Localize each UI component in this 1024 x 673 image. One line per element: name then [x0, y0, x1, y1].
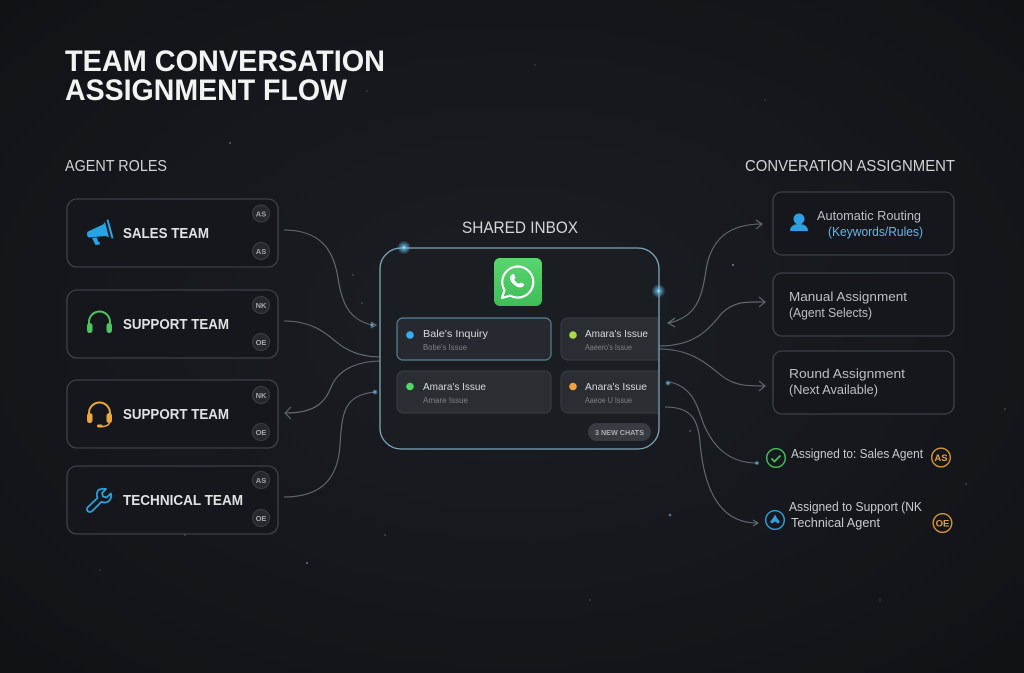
icon: orange headset [87, 403, 112, 428]
icon: wrench [87, 489, 111, 512]
routing text: Automatic Routing [817, 208, 921, 223]
avatar badges [252, 296, 270, 350]
panel: round assignment [773, 351, 954, 414]
new chats badge [588, 423, 651, 441]
team label: sales: SALES TEAM [123, 226, 209, 242]
badge: OE: OE [936, 518, 949, 530]
avatar badges [252, 205, 270, 260]
heading: conversation assignment: CONVERATION ASSIGNMENT [745, 158, 955, 175]
chat card: amara's issue green [397, 371, 551, 413]
chat card: amara's issue green: Amara's Issue [423, 381, 486, 393]
routing text [817, 208, 923, 239]
team label: support: SUPPORT TEAM [123, 317, 229, 333]
chat card: amara's issue lime: Amara's Issue [585, 328, 648, 340]
heading: agent roles: AGENT ROLES [65, 158, 167, 175]
chat card: bale's inquiry [397, 318, 551, 360]
heading: shared inbox: SHARED INBOX [462, 218, 578, 237]
chat card: amara's issue orange: Anara's Issue [585, 381, 647, 393]
panel: manual assignment: Manual Assignment [789, 289, 907, 304]
title [65, 45, 385, 107]
chat card: amara's issue orange [561, 371, 658, 413]
badge: AS: AS [934, 453, 948, 464]
avatar badges: NK [256, 301, 267, 310]
avatar badges: AS [256, 210, 266, 218]
connector arrows: teams to inbox [284, 230, 381, 497]
team label: technical: TECHNICAL TEAM [123, 493, 243, 509]
chat card: amara's issue lime [561, 318, 658, 360]
panel: technical team [67, 466, 278, 534]
badge: AS [932, 448, 950, 467]
panel: round assignment: (Next Available) [789, 382, 878, 397]
avatar badges: OE [256, 514, 266, 523]
avatar badges: OE [256, 338, 266, 347]
icon: green check [767, 449, 785, 467]
status: assigned to support: Assigned to Support (NK [789, 500, 923, 514]
panel: round assignment: Round Assignment [789, 366, 905, 381]
panel: support team two [67, 380, 278, 448]
title: TEAM CONVERSATION [65, 45, 385, 78]
team label: support: SUPPORT TEAM [123, 407, 229, 423]
icon: blue agent [766, 511, 784, 529]
chat card: amara's issue orange: Aaeoe U Issue [585, 396, 632, 405]
icon: megaphone [87, 220, 114, 245]
chat card: bale's inquiry: Bale's Inquiry [423, 328, 489, 340]
chat card: amara's issue lime: Aaeero's Issue [585, 343, 632, 352]
icon: green headphones [87, 312, 112, 333]
routing text: (Keywords/Rules) [828, 224, 923, 239]
panel: sales team [67, 199, 278, 267]
avatar badges: AS [256, 247, 266, 256]
new chats badge: 3 NEW CHATS [595, 428, 644, 437]
avatar badges [252, 472, 270, 526]
status: assigned to sales agent [767, 447, 950, 467]
status: assigned to sales agent: Assigned to: Sales Agent [791, 447, 923, 461]
panel: shared inbox [380, 240, 666, 449]
avatar badges: AS [256, 476, 266, 485]
panel: manual assignment: (Agent Selects) [789, 305, 872, 320]
chat card: amara's issue green: Amare Issue [423, 396, 469, 405]
chat card: bale's inquiry: Bobe's Issue [423, 343, 468, 352]
icon: person [790, 214, 808, 231]
avatar badges: NK [256, 391, 267, 400]
panel: manual assignment [773, 273, 954, 336]
status: assigned to support [766, 500, 952, 532]
avatar badges: OE [256, 428, 266, 437]
badge: OE [933, 514, 952, 532]
panel: support team [67, 290, 278, 358]
icon: whatsapp [494, 258, 542, 306]
glow node: top [397, 240, 411, 254]
glow node: right [652, 284, 666, 298]
connector arrows: inbox to assignment [659, 220, 765, 526]
status: assigned to support: Technical Agent [791, 516, 881, 530]
avatar badges [252, 386, 270, 440]
panel: automatic routing [773, 192, 954, 255]
title: ASSIGNMENT FLOW [65, 74, 348, 107]
